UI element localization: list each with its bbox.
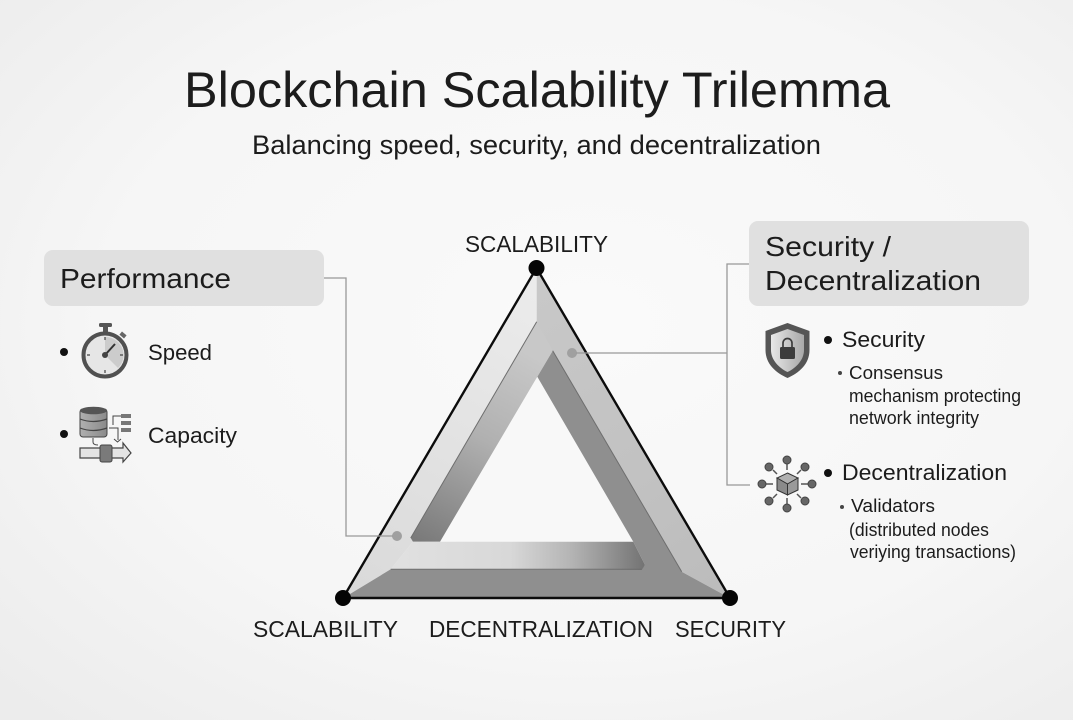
- vertex dot right: [722, 590, 738, 606]
- bullet: [60, 430, 68, 438]
- sub-bullet: [838, 371, 842, 375]
- anchor dot left: [392, 531, 402, 541]
- description: decentralization: Validators: [851, 496, 935, 516]
- label: decentralization: Decentralization: [842, 460, 1007, 485]
- vertex label: top scalability: SCALABILITY: [465, 231, 608, 257]
- description: security: mechanism protecting: [849, 386, 1021, 406]
- outline: [343, 268, 730, 598]
- heading box: [749, 221, 1029, 306]
- subtitle: Balancing speed, security, and decentralization: [252, 130, 821, 160]
- vertex label: security: SECURITY: [675, 616, 786, 642]
- icon: shield: [766, 323, 810, 378]
- right medium face: [537, 270, 728, 597]
- bullet: [824, 336, 832, 344]
- vertex dot top: [528, 260, 544, 276]
- heading line 1: Security /: [765, 231, 891, 262]
- description: security: Consensus: [849, 363, 943, 383]
- heading line 2: Decentralization: [765, 265, 981, 296]
- description: decentralization: (distributed nodes: [849, 520, 989, 540]
- connector: security and decentralization to triangle: [576, 264, 750, 485]
- bullet: [824, 469, 832, 477]
- bottom and right dark face: [345, 351, 728, 597]
- edge label: decentralization: DECENTRALIZATION: [429, 616, 653, 642]
- left inner strip: [411, 322, 553, 542]
- vertex dot left: [335, 590, 351, 606]
- horizontal inner band: [391, 542, 645, 570]
- connector: performance to triangle: [324, 278, 393, 536]
- description: decentralization: [849, 496, 1016, 562]
- description: security: [849, 363, 1021, 428]
- label: security: Security: [842, 327, 925, 352]
- icon: decentralized network: [758, 456, 816, 512]
- description: decentralization: veriying transactions): [850, 542, 1016, 562]
- description: security: network integrity: [849, 408, 979, 428]
- title: Blockchain Scalability Trilemma: [184, 62, 890, 118]
- label: speed: Speed: [148, 340, 212, 365]
- sub-bullet: [840, 505, 844, 509]
- anchor dot right: [567, 348, 577, 358]
- icon: database and pipe: [80, 407, 131, 462]
- icon: stopwatch: [84, 323, 127, 376]
- heading: Performance: [60, 263, 231, 294]
- bullet: [60, 348, 68, 356]
- inner shadow lines: [391, 322, 682, 572]
- label: capacity: Capacity: [148, 423, 237, 448]
- hole: [440, 377, 633, 542]
- heading box: [44, 250, 324, 306]
- vertex label: bottom scalability: SCALABILITY: [253, 616, 398, 642]
- trilemma triangle: [335, 260, 738, 606]
- panel: performance: [44, 250, 324, 462]
- panel: security and decentralization: [749, 221, 1029, 562]
- left light face: [345, 270, 537, 597]
